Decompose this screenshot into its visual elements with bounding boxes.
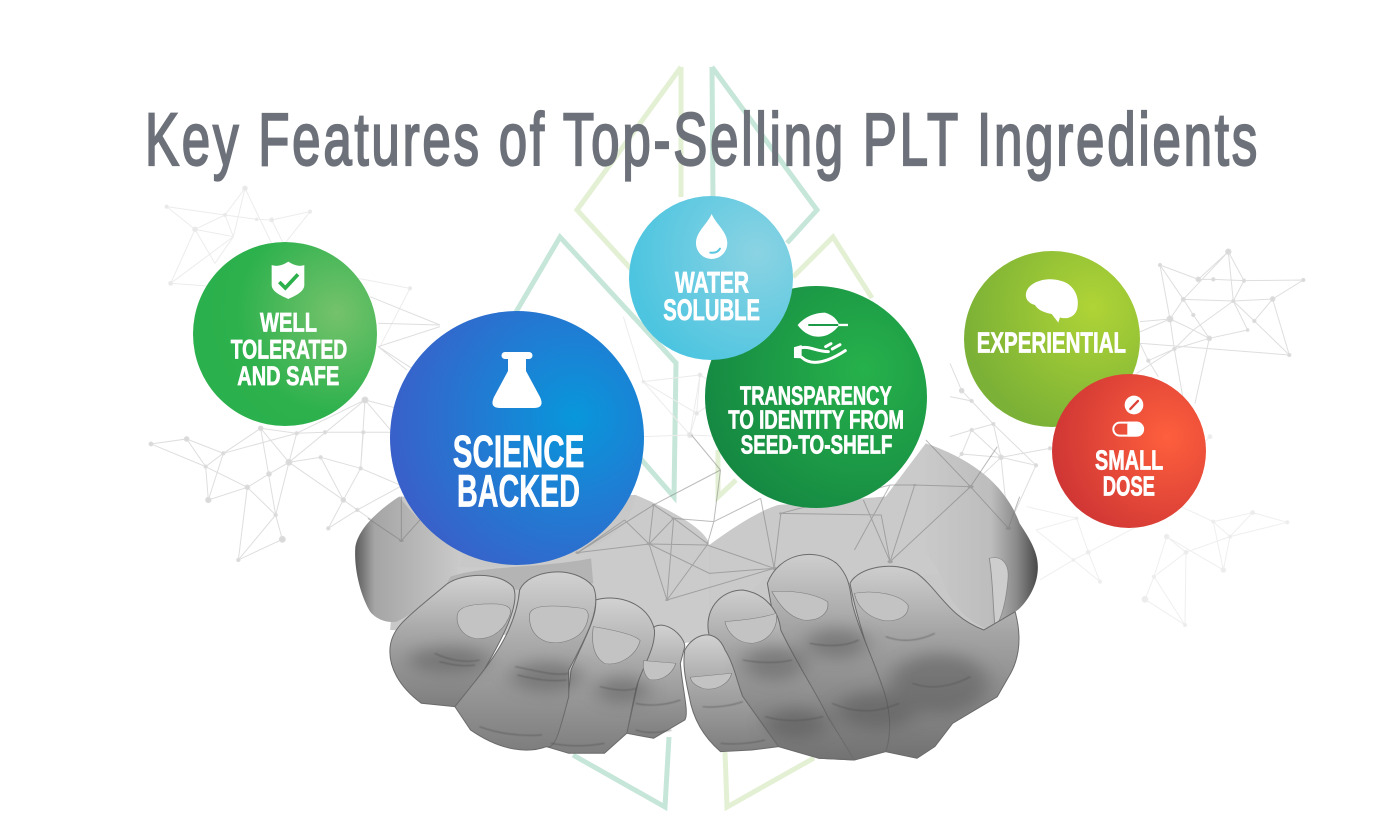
label: science backed: SCIENCE [453,426,584,477]
label: transparency to identity from seed-to-shelf: SEED-TO-SHELF [741,429,892,459]
left palm [457,495,709,643]
circle: water soluble [629,196,793,360]
thumb nail [989,558,1008,627]
circle: transparency to identity [705,286,927,508]
network: centre between circles [623,317,727,438]
label: well tolerated and safe: AND SAFE [237,361,339,391]
left thumb [355,497,463,622]
label: water soluble: SOLUBLE [663,294,760,327]
label: small dose: SMALL [1095,444,1163,475]
label: transparency to identity from seed-to-shelf: TO IDENTITY FROM [728,404,904,434]
background leaf outlines [516,67,872,807]
network overlay on hands [368,435,1020,601]
icon: pill and capsule [1113,396,1144,437]
label: small dose [1095,444,1163,502]
label: transparency to identity from seed-to-shelf: TRANSPARENCY [740,380,892,410]
label: water soluble [663,267,760,327]
label: science backed [453,426,584,516]
label: water soluble: WATER [675,267,749,300]
right palm [711,443,939,637]
network: upper left (faint) [165,186,412,347]
knuckle wrinkles [435,633,970,746]
label: well tolerated and safe [231,308,347,391]
label: experiential: EXPERIENTIAL [977,328,1126,360]
fingers [390,554,1019,760]
circle: small dose [1052,374,1206,528]
label: transparency to identity from seed-to-shelf [728,380,904,459]
knuckle shading [408,628,988,738]
icon: flask [492,352,542,408]
network: lower left [149,297,440,562]
icon: leaf over hand [794,313,848,362]
network: upper right [1137,249,1305,403]
label: science backed: BACKED [457,466,580,516]
network: mid right [950,363,1052,527]
finger nails [457,591,908,689]
label: well tolerated and safe: WELL [260,308,317,338]
label: well tolerated and safe: TOLERATED [231,334,347,364]
icon: water drop [696,214,727,259]
icon: shield with check [272,262,304,299]
network: lower right (faint) [1027,435,1289,627]
photo: cupped hands [355,443,1038,760]
icon: brain [1026,279,1078,323]
label: small dose: DOSE [1103,471,1155,502]
circle: well tolerated and safe [193,242,377,426]
circle: science backed [390,311,644,565]
title: Key Features of Top-Selling PLT Ingredients [145,99,1257,181]
infographic canvas [148,66,1306,812]
circle: experiential [964,251,1140,427]
right thumb [904,443,1038,630]
